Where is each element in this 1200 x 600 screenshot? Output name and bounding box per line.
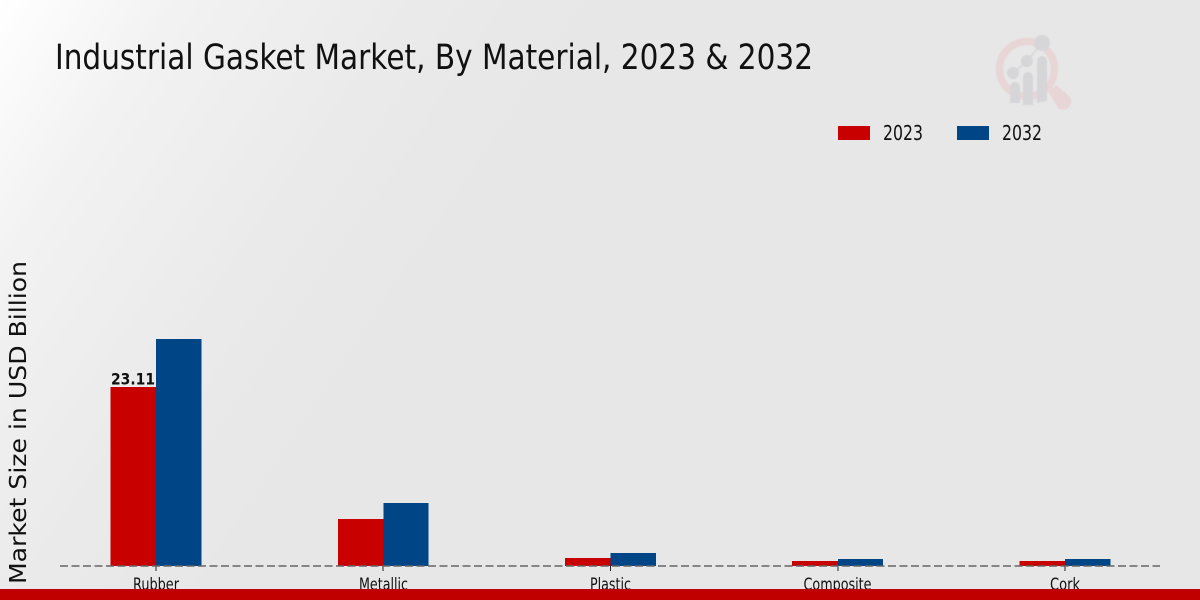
group: Rubber: Rubber <box>133 575 179 595</box>
bar chart <box>110 339 1110 595</box>
legend item: 2032 <box>957 121 1042 145</box>
group: Cork: Cork <box>1050 575 1080 595</box>
group: Cork <box>1020 559 1110 595</box>
group: Composite: Composite <box>804 575 872 595</box>
group: Metallic <box>338 503 428 595</box>
group: Plastic <box>565 553 656 595</box>
group: Rubber <box>110 339 202 595</box>
legend item: 2023 <box>838 121 923 145</box>
data label: 23.11: 23.11 <box>111 370 155 388</box>
group: Metallic: Metallic <box>359 575 408 595</box>
y-axis label: Market Size in USD Billion <box>4 261 32 584</box>
legend item: 2032: 2032 <box>1002 121 1042 145</box>
icon: watermark logo <box>1000 35 1071 110</box>
legend item: 2023: 2023 <box>883 121 923 145</box>
title: Industrial Gasket Market, By Material, 2023 & 2032 <box>55 38 813 78</box>
group: Composite <box>792 559 883 595</box>
legend <box>838 121 1042 145</box>
footer bar <box>0 589 1200 600</box>
group: Plastic: Plastic <box>590 575 631 595</box>
